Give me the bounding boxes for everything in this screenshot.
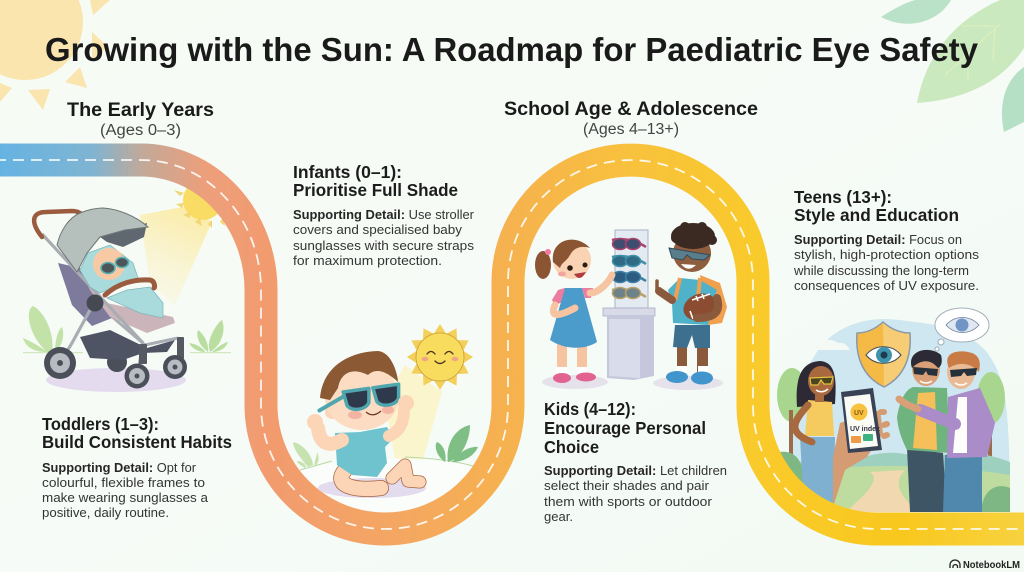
- icon: phone with UV index: UV: [854, 410, 864, 417]
- text block: Teens: Supporting Detail: Focus on: [794, 232, 962, 247]
- text block: Teens: Style and Education: [794, 205, 959, 225]
- text block: Infants: for maximum protection.: [293, 253, 442, 268]
- text block: Toddlers: positive, daily routine.: [42, 505, 169, 520]
- text block: Kids: Choice: [544, 437, 599, 457]
- text block: Toddlers: colourful, flexible frames to: [42, 475, 205, 490]
- figure: boy with backpack and football: [657, 222, 727, 384]
- text block: Infants: Infants (0–1):: [293, 162, 402, 182]
- icon: football: [680, 289, 720, 325]
- figure: girl in blue dress: [535, 240, 612, 383]
- heading: The Early Years: [67, 99, 214, 139]
- icon: left plant: [293, 442, 319, 468]
- text block: Toddlers: Toddlers (1–3):: [42, 414, 159, 434]
- illustration: baby in stroller: [23, 208, 231, 392]
- text block: Kids: select their shades and pair: [544, 478, 710, 493]
- text block: Teens: consequences of UV exposure.: [794, 278, 979, 293]
- icon: thought bubble eye: [935, 308, 989, 351]
- icon: stroller wheels: [44, 347, 187, 388]
- text block: Toddlers: Supporting Detail: Opt for: [42, 460, 197, 475]
- road: winding path from blue to yellow: [0, 160, 1024, 529]
- heading: The Early Years: The Early Years: [67, 99, 214, 121]
- text block: Toddlers: Build Consistent Habits: [42, 432, 232, 452]
- text block: Kids: Kids (4–12):: [544, 399, 636, 419]
- figure: girl with sunglasses: [795, 361, 836, 505]
- text block: Kids: [544, 399, 727, 524]
- text block: Kids: gear.: [544, 509, 573, 524]
- icon: baby sunglasses: [101, 258, 128, 274]
- heading: School Age and Adolescence: (Ages 4–13+): [583, 121, 679, 138]
- figure: boy in green jacket: [897, 350, 950, 512]
- icon: phone with UV index: UV index: [850, 426, 880, 433]
- illustration: kids choosing sunglasses: [535, 222, 727, 390]
- figure: boy in purple shirt: [899, 351, 995, 512]
- icon: smiling sun: [407, 324, 473, 390]
- text block: Teens: [793, 187, 980, 293]
- text block: Kids: Supporting Detail: Let children: [544, 463, 727, 478]
- text block: Infants: Supporting Detail: Use stroller: [293, 207, 475, 222]
- text block: Infants: [293, 162, 475, 268]
- icon: right plant: [436, 425, 478, 462]
- text block: Infants: sunglasses with secure straps: [293, 238, 475, 253]
- illustration: teens scene: [777, 308, 1010, 512]
- text block: Kids: Encourage Personal: [544, 418, 706, 438]
- text block: Teens: while discussing the long-term: [793, 263, 969, 278]
- icon: shield with eye: [857, 322, 910, 387]
- text block: Toddlers: make wearing sunglasses a: [42, 490, 209, 505]
- heading: The Early Years: (Ages 0–3): [100, 122, 181, 139]
- text block: Kids: them with sports or outdoor: [544, 494, 713, 509]
- text block: Toddlers: [42, 414, 232, 520]
- text block: Teens: Teens (13+):: [794, 187, 892, 207]
- text block: Infants: Prioritise Full Shade: [293, 180, 458, 200]
- text block: Teens: stylish, high-protection options: [794, 247, 980, 262]
- illustration: baby with sunglasses and smiling sun: [293, 324, 478, 512]
- decorative corner sun: [0, 0, 110, 110]
- heading: School Age and Adolescence: [504, 98, 758, 138]
- icon: left plant: [23, 306, 83, 353]
- illustration: stroller sun beam: [140, 180, 225, 305]
- title: Growing with the Sun: A Roadmap for Paediatric Eye Safety: [45, 31, 979, 68]
- decorative corner leaves: [881, 0, 1024, 132]
- icon: teal sunglasses: [317, 384, 401, 415]
- icon: sunglasses display stand: [603, 230, 655, 380]
- heading: School Age and Adolescence: School Age & Adolescence: [504, 98, 758, 120]
- text block: Infants: covers and specialised baby: [293, 222, 463, 237]
- icon: right plant: [189, 320, 231, 353]
- icon: phone with UV index: [833, 388, 887, 507]
